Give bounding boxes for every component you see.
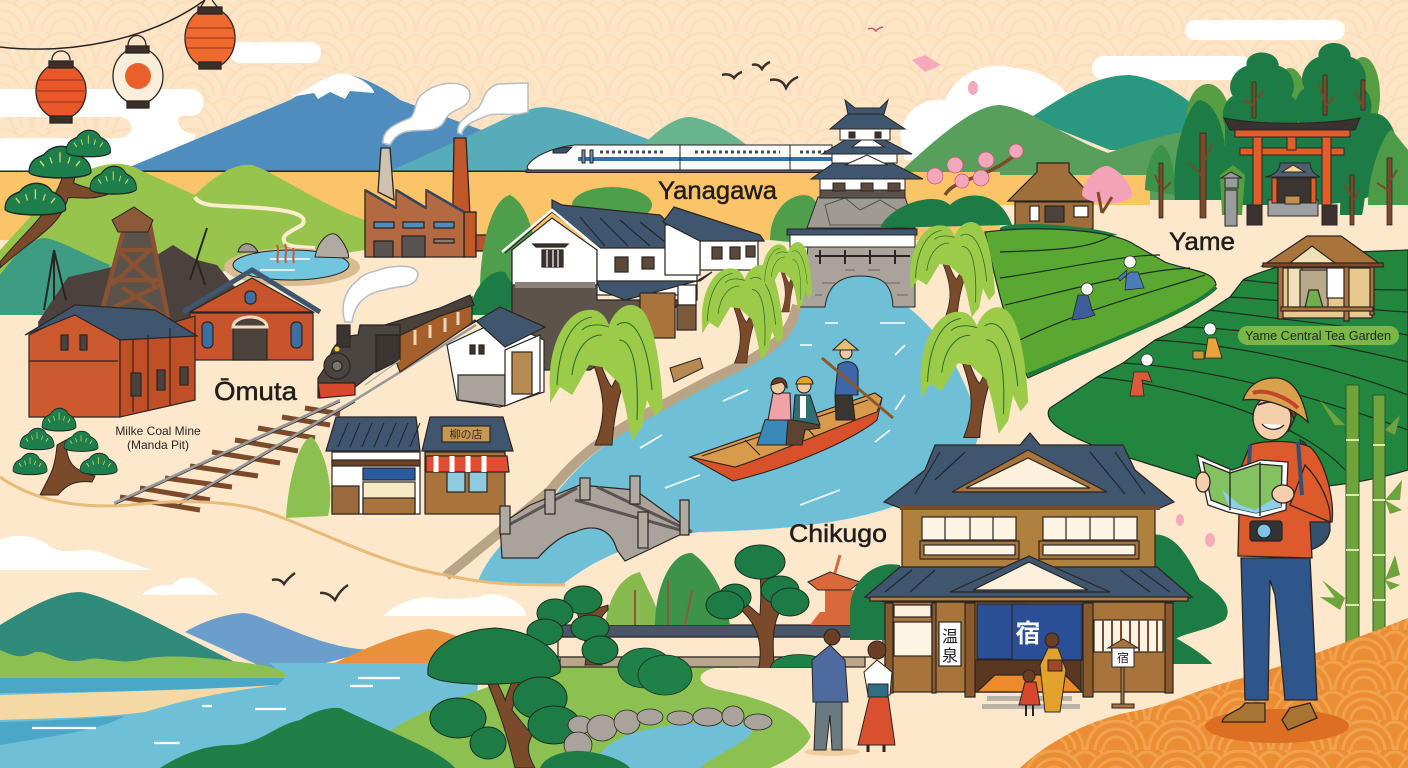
shoes bbox=[1222, 703, 1265, 722]
coal slag heap bbox=[38, 245, 265, 350]
tree behind ryokan bbox=[850, 534, 1228, 664]
label pill: Yame Central Tea Garden bbox=[1238, 326, 1399, 345]
caption: Milke Coal Mine bbox=[115, 424, 201, 452]
lower-left clouds bbox=[0, 536, 526, 616]
deep water strip bbox=[0, 678, 285, 693]
petals bbox=[912, 55, 1215, 547]
onsen vertical sign bbox=[939, 622, 961, 666]
brick warehouse bbox=[25, 305, 197, 417]
hedges bbox=[618, 648, 838, 695]
tea terraces: left field bbox=[985, 229, 1216, 378]
stone lantern bbox=[1221, 172, 1242, 226]
onsen vertical sign: 泉 bbox=[942, 647, 958, 665]
onsen vertical sign: 温 bbox=[942, 628, 958, 646]
left small pine bbox=[13, 408, 117, 495]
seated man bbox=[786, 376, 820, 445]
place label: Yanagawa: Yanagawa bbox=[658, 177, 777, 205]
deep water bottom bbox=[0, 716, 125, 745]
noren curtain: 宿 bbox=[1015, 620, 1041, 648]
cedar grove bbox=[1145, 43, 1408, 225]
traveller shadow bbox=[1205, 709, 1349, 743]
tea terraces: right field bbox=[1048, 250, 1408, 489]
tall pine bbox=[706, 545, 809, 672]
place label: Ōmuta: Ōmuta bbox=[214, 376, 298, 406]
dark green hill bbox=[160, 708, 455, 768]
wooden bench bbox=[670, 358, 703, 382]
factory (brick sawtooth) bbox=[365, 138, 501, 257]
garden pond with stones bbox=[564, 706, 772, 768]
green bushes beside castle bbox=[880, 195, 1118, 250]
tree by castle bbox=[770, 195, 822, 245]
wooden post sign bbox=[1108, 639, 1138, 708]
winding road to the onsen bbox=[195, 197, 315, 248]
upper roof bbox=[884, 433, 1174, 508]
canal bank wall bbox=[446, 305, 797, 576]
mountain: teal ridge bbox=[390, 107, 680, 171]
hills: right green slope bbox=[900, 105, 1195, 200]
big foreground pine bbox=[428, 628, 580, 768]
straw hat bbox=[1243, 378, 1308, 422]
tan path line bbox=[0, 477, 565, 585]
hills behind Yanagawa bbox=[480, 187, 652, 290]
traveller with map bbox=[1196, 378, 1333, 730]
mother in kimono bbox=[1040, 633, 1066, 712]
plain band right bbox=[1000, 175, 1150, 205]
gondolier bbox=[822, 339, 893, 420]
mountain: green ridge bbox=[620, 117, 775, 171]
castle bbox=[807, 100, 923, 228]
garden wall bbox=[552, 625, 887, 667]
smoke from factory chimneys bbox=[383, 83, 528, 145]
water highlights bbox=[640, 323, 905, 505]
backpack bbox=[1300, 440, 1330, 550]
sky clouds bbox=[0, 20, 1345, 172]
small white kura bbox=[447, 307, 545, 407]
ryokan bbox=[865, 433, 1192, 697]
tea pickers bbox=[1072, 256, 1222, 396]
torii gate bbox=[1224, 118, 1360, 225]
onsen pond with steam bbox=[224, 234, 360, 286]
caption: Milke Coal Mine: (Manda Pit) bbox=[127, 438, 189, 452]
camera bbox=[1250, 521, 1282, 541]
hall: gable brick building bbox=[183, 270, 320, 360]
mountain: snow-capped blue peak bbox=[120, 73, 515, 171]
upper storey bbox=[902, 508, 1155, 570]
patterned sky bbox=[0, 0, 1408, 172]
lantern right bbox=[185, 0, 235, 69]
lanterns on a string bbox=[0, 0, 235, 123]
boat with passengers bbox=[690, 339, 893, 481]
sakura branch bbox=[927, 144, 1023, 195]
caption: Milke Coal Mine: Milke Coal Mine bbox=[115, 424, 201, 438]
lower-left mountain: teal bbox=[0, 592, 245, 670]
horizon line bbox=[0, 170, 830, 172]
roadside bush bbox=[286, 437, 330, 518]
green garden ground bbox=[385, 662, 812, 768]
pink sakura tree bbox=[1082, 166, 1132, 213]
seated woman bbox=[757, 378, 791, 445]
entry steps bbox=[982, 696, 1080, 709]
train smoke bbox=[343, 266, 418, 322]
lantern left bbox=[36, 51, 86, 123]
white moat wall bbox=[787, 229, 917, 247]
sweater bbox=[1238, 441, 1333, 558]
ground path bbox=[701, 668, 1170, 768]
ground floor bbox=[885, 602, 1173, 697]
orange patterned hill bbox=[1020, 618, 1408, 768]
lower roof bbox=[865, 556, 1192, 602]
river bbox=[478, 260, 979, 585]
shop left bbox=[326, 417, 420, 514]
river highlights bbox=[32, 678, 400, 743]
thatched farmhouse bbox=[1008, 163, 1096, 229]
place label: Chikugo: Chikugo bbox=[789, 520, 887, 548]
hill: teal foothill bbox=[0, 238, 110, 315]
birds bbox=[272, 27, 883, 600]
place label: Yame: Yame bbox=[1169, 228, 1235, 256]
lantern centre bbox=[113, 36, 163, 108]
mine: headframe tower bbox=[44, 207, 207, 318]
Yanagawa second storehouse bbox=[663, 207, 764, 275]
head bbox=[1253, 396, 1291, 440]
shop right with awning: 柳の店 bbox=[450, 427, 482, 441]
willows bbox=[550, 222, 1028, 445]
tea hut bbox=[1262, 236, 1383, 321]
folded map bbox=[1197, 455, 1288, 518]
top-left big pine bbox=[0, 130, 136, 268]
lower mountain: blue bbox=[185, 613, 375, 675]
bullet train bbox=[526, 145, 834, 172]
Yanagawa main white storehouse bbox=[502, 200, 712, 370]
lower-left water bbox=[0, 663, 480, 768]
child bbox=[1019, 670, 1040, 716]
visiting couple bbox=[804, 629, 895, 756]
mid pine bbox=[527, 586, 618, 665]
ornate stone bridge bbox=[500, 476, 692, 561]
sand spit bbox=[0, 685, 276, 720]
hands bbox=[1196, 472, 1210, 492]
woman bbox=[858, 641, 895, 752]
steam train bbox=[318, 295, 474, 398]
stone bridge at moat bbox=[800, 247, 915, 307]
shrine bbox=[1265, 163, 1320, 216]
bush at pond bottom bbox=[540, 751, 630, 768]
noren curtain bbox=[977, 604, 1082, 660]
lower mountain: orange bbox=[325, 629, 480, 668]
bamboo bbox=[1320, 385, 1402, 650]
green shore strip bbox=[0, 650, 285, 679]
orange plain band bbox=[0, 172, 1000, 240]
Rail track bbox=[114, 325, 476, 510]
shop right with awning bbox=[422, 417, 513, 514]
label pill: Yame Central Tea Garden: Yame Central Tea Garden bbox=[1245, 329, 1391, 343]
mountain: teal peak right bbox=[1030, 75, 1200, 150]
wooden post sign: 宿 bbox=[1117, 651, 1129, 665]
man bbox=[804, 629, 860, 756]
dark bushes bbox=[470, 272, 530, 315]
trees behind wall bbox=[605, 553, 862, 625]
trousers bbox=[1241, 558, 1317, 700]
hills: left green bbox=[0, 164, 365, 310]
